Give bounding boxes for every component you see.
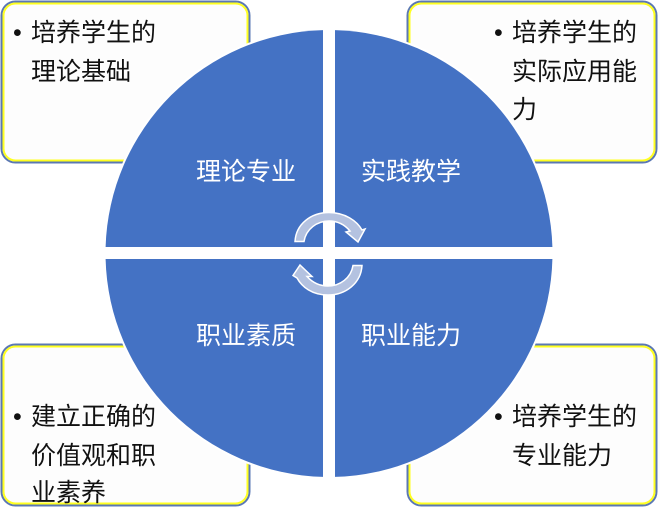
text: top-right description: 实际应用能 [512, 58, 637, 86]
text: top-right description: 力 [512, 96, 537, 124]
text: bottom-left description: 业素养 [31, 479, 106, 507]
quadrant: practice [335, 30, 552, 247]
label: professional quality: 职业素质 [196, 322, 296, 350]
panel: top-left theory foundation [2, 2, 250, 162]
text: bottom-right bullet: • [494, 403, 503, 431]
text: bottom-left bullet: • [13, 403, 22, 431]
text: top-right description: 培养学生的 [512, 19, 637, 47]
panel: bottom-left values [2, 344, 250, 507]
text: bottom-left description: 建立正确的 [31, 403, 156, 431]
text: top-left description: 培养学生的 [31, 19, 156, 47]
text: top-left bullet: • [13, 19, 22, 47]
text: top-right bullet: • [494, 19, 503, 47]
quadrant: professional ability [335, 259, 552, 477]
label: practice: 实践教学 [361, 158, 461, 186]
panel: top-right practical ability [408, 2, 656, 162]
quadrant: theory [106, 30, 323, 247]
text: bottom-left description: 价值观和职 [31, 442, 156, 470]
chart: four-quadrant circle [104, 28, 554, 479]
label: theory: 理论专业 [196, 158, 296, 186]
arrow: clockwise lower [293, 265, 362, 295]
quadrant: professional quality [106, 259, 323, 477]
text: bottom-right description: 专业能力 [512, 442, 612, 470]
panel: bottom-right professional ability [408, 344, 656, 506]
text: bottom-right description: 培养学生的 [512, 403, 637, 431]
label: professional ability: 职业能力 [361, 322, 461, 350]
text: top-left description: 理论基础 [31, 58, 131, 86]
arrow: clockwise upper [295, 212, 365, 242]
